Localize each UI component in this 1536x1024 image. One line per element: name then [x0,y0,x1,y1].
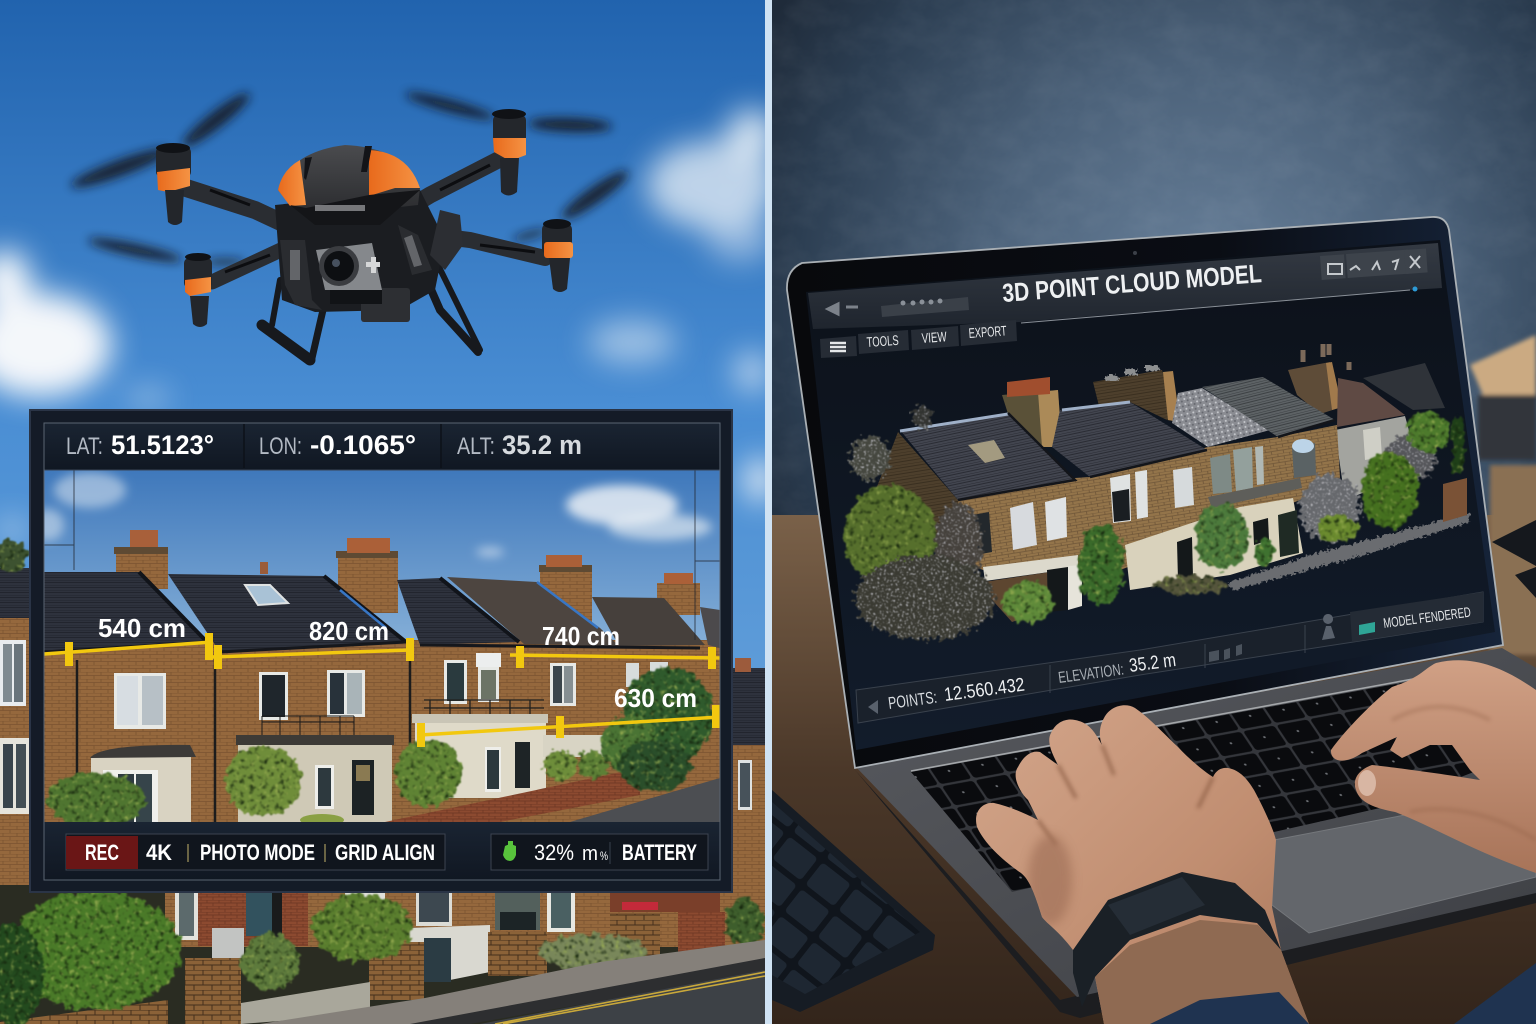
drone [68,88,632,360]
upper windows [77,653,668,822]
wall background [772,0,1536,560]
laptop base [855,648,1536,1018]
second keyboard [772,790,935,1012]
status group: battery: 32% [534,840,574,865]
status bar [856,592,1483,723]
altitude: 35.2 m [502,430,582,460]
HUD crosshair guide lines [44,470,720,640]
measurement: 540 cm: 540 cm [98,613,186,643]
model vegetation [844,405,1465,640]
status bar: POINTS: [887,688,938,713]
3D point cloud of houses [844,344,1470,640]
pavement, kerb and road [260,940,765,1024]
status group: recording mode: GRID ALIGN [335,840,435,865]
sky background [0,0,765,668]
background houses left of the HUD [0,536,29,885]
landing gear [256,265,483,366]
central chassis [275,190,445,312]
latitude [66,430,214,460]
background houses right of the HUD [732,658,765,895]
side modules [280,240,322,310]
HUD camera photo of terraced houses [32,470,720,827]
chimneys [114,530,700,622]
menu tabs [820,320,1017,358]
measurement: 820 cm [212,616,410,669]
white wall with door [408,925,490,980]
arms [180,160,545,282]
tan object in background [1470,335,1536,460]
altitude: ALT: [457,433,495,460]
front wall and road [385,768,640,822]
ground-floor bays [90,700,605,822]
hedges and trees [9,890,181,1010]
status group: battery [491,834,708,870]
desk [772,515,1536,1024]
dome with orange panels [278,145,420,215]
model skylight [968,440,1005,463]
propellers (motion blur) [68,88,632,266]
HUD bottom bar [44,822,720,880]
measurement: 540 cm [44,618,213,666]
screen title bar [808,243,1442,329]
status group: recording mode: PHOTO MODE [200,840,315,865]
panel: laptop with 3D model (right) [772,0,1536,1024]
status bar: ELEVATION: [1057,661,1125,687]
divider between panels [765,0,772,1024]
HUD frame [30,410,732,892]
hand: right hand with thumb over keyboard [1331,660,1536,873]
status group: recording mode: 4K [146,840,172,865]
latitude: LAT: [66,433,103,460]
latitude: 51.5123° [111,430,214,460]
icon: model rendered [1359,622,1375,635]
trackpad [1272,790,1536,933]
phone on desk [1492,520,1536,598]
keyboard [911,668,1492,892]
brick facades [44,640,720,822]
screen [806,240,1495,750]
deck underside [855,770,1536,1018]
title text: 3D POINT CLOUD MODEL [1001,258,1263,308]
status group: recording mode [66,834,445,870]
measurement: 630 cm: 630 cm [614,683,697,713]
chimney two [1093,370,1180,422]
menu tabs: EXPORT [968,322,1007,341]
status bar: 35.2 m [1128,650,1177,677]
drone label strip [315,205,365,211]
low concrete wall [241,982,370,1024]
gravel path [1227,513,1470,590]
measurement: 740 cm [510,626,720,669]
toolbar icons [1320,248,1428,280]
nav dots [881,297,969,317]
menu tabs: VIEW [921,328,948,346]
measurement: 740 cm: 740 cm [542,621,620,651]
altitude [457,430,582,460]
menu tabs: TOOLS [866,332,899,350]
photo clouds [32,472,712,557]
model balcony [1208,478,1302,508]
status group: recording mode: REC [85,840,119,865]
house fronts [165,885,765,947]
camera gimbal [361,288,410,322]
motors [156,109,573,327]
longitude [259,430,416,460]
far roof and rear house [1363,363,1445,410]
deck [855,648,1536,997]
HUD top bar: coordinates [44,423,720,470]
model ground floors [983,555,1078,581]
photo sky [44,470,720,640]
trees and bushes [46,667,714,827]
clouds [0,109,778,542]
chimney three [1288,362,1342,414]
longitude: -0.1065° [310,430,416,460]
laptop lid and bezel [787,217,1503,768]
panel: drone camera HUD [30,410,732,892]
brick stub at right [1443,478,1467,522]
status group: battery: m [582,843,598,865]
icon: green battery [503,841,516,861]
model windows [967,439,1316,556]
status bar: 12.560.432 [943,675,1026,706]
measurement: 630 cm [420,683,720,747]
wristwatch [1073,872,1281,1007]
status bar: MODEL FENDERED [1382,604,1472,631]
brick pillars [610,914,660,956]
gable wall [873,432,960,560]
hand: left hand on keyboard with knuckles [976,705,1309,1024]
roofs [900,413,1075,500]
roofs [44,572,720,652]
status group: battery: % [600,849,608,863]
longitude: LON: [259,433,302,460]
street foreground below the HUD [0,885,765,1024]
chimney one [1002,390,1062,447]
status group: battery: BATTERY [622,840,697,865]
skylight [245,585,288,605]
panel: drone capture (left) [0,0,778,1024]
main facade [958,425,1340,570]
measurement: 820 cm: 820 cm [309,616,389,646]
shirt sleeve [1150,963,1536,1024]
